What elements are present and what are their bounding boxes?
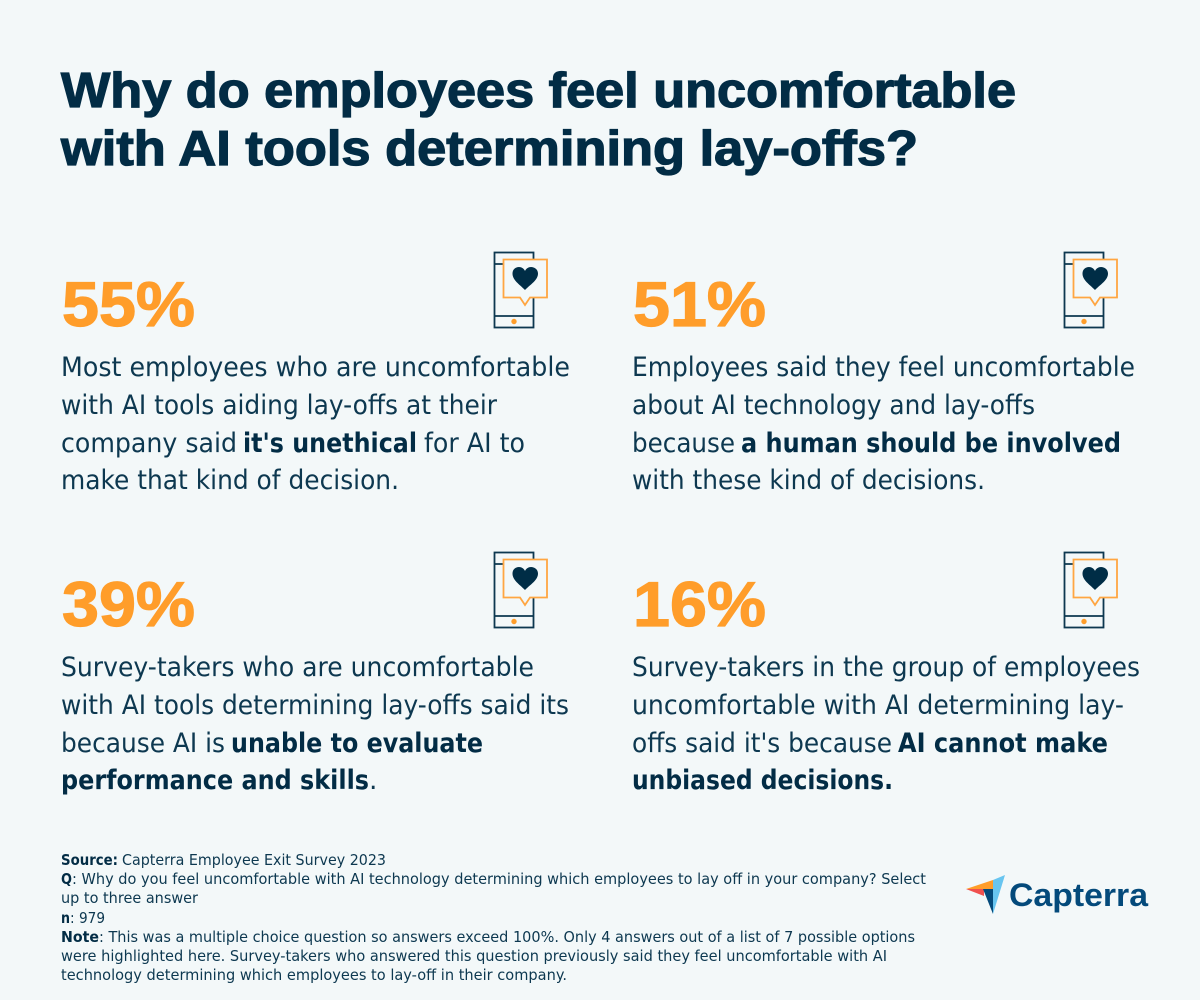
text: 39% description: because AI is <box>61 728 225 759</box>
stat: 16%: 16% <box>633 570 766 640</box>
stat: 55%: 55% <box>62 270 195 340</box>
text: 39% description: Survey-takers who are uncomfortable <box>61 652 534 683</box>
text: 39% description: with AI tools determining lay-offs said its <box>61 690 569 721</box>
title: with AI tools determining lay-offs? <box>60 122 918 176</box>
text: 55% description: make that kind of decision. <box>61 465 399 496</box>
text: 16% description: uncomfortable with AI determining lay- <box>632 690 1124 721</box>
source notes: Source: <box>61 851 118 869</box>
icon: phone with heart <box>1064 252 1117 328</box>
source notes: : 979 <box>70 909 105 927</box>
source notes: : Why do you feel uncomfortable with AI technology determining which employees to lay off in your company? Select <box>72 870 926 888</box>
source notes <box>61 851 926 984</box>
source notes: were highlighted here. Survey-takers who answered this question previously said they feel uncomfortable with AI <box>61 947 887 965</box>
panel: 39% unable to evaluate <box>61 552 569 796</box>
panel: 55% unethical <box>61 252 570 496</box>
text: 51% description: with these kind of decisions. <box>632 465 985 496</box>
source notes: Capterra Employee Exit Survey 2023 <box>122 851 386 869</box>
icon: phone with heart <box>494 552 547 628</box>
text: 55% description: company said <box>61 428 237 459</box>
source notes: n <box>61 909 70 927</box>
text: 55% description: Most employees who are uncomfortable <box>61 352 570 383</box>
stat: 51%: 51% <box>633 270 766 340</box>
text: 51% description: Employees said they feel uncomfortable <box>632 352 1135 383</box>
text: 16% description: Survey-takers in the group of employees <box>632 652 1140 683</box>
title <box>60 64 1016 176</box>
text: 39% description <box>61 652 569 796</box>
text: 55% description: it's unethical <box>243 428 417 459</box>
icon: Capterra arrow <box>966 875 1005 914</box>
source notes: up to three answer <box>61 889 199 907</box>
title: Why do employees feel uncomfortable <box>61 64 1016 118</box>
text: 55% description: with AI tools aiding lay-offs at their <box>61 390 497 421</box>
text: 51% description: a human should be involved <box>741 428 1121 459</box>
text: 16% description: AI cannot make <box>898 728 1108 759</box>
text: 51% description: because <box>632 428 735 459</box>
logo: Capterra <box>966 875 1148 914</box>
text: 16% description: unbiased decisions. <box>632 765 893 796</box>
source notes: Q <box>61 870 72 888</box>
text: 16% description: offs said it's because <box>632 728 892 759</box>
source notes: Note <box>61 928 99 946</box>
text: 51% description: about AI technology and lay-offs <box>632 390 1035 421</box>
text: 39% description: performance and skills <box>61 765 369 796</box>
source notes: technology determining which employees to lay-off in their company. <box>61 966 567 984</box>
icon: phone with heart <box>494 252 547 328</box>
text: 55% description: for AI to <box>424 428 525 459</box>
text: 55% description <box>61 352 570 496</box>
icon: phone with heart <box>1064 552 1117 628</box>
text: 39% description: unable to evaluate <box>231 728 483 759</box>
panel: 16% biased decisions <box>632 552 1140 796</box>
stat: 39%: 39% <box>62 570 195 640</box>
wordmark: Capterra <box>1009 877 1148 913</box>
source notes: : This was a multiple choice question so answers exceed 100%. Only 4 answers out of a list of 7 possible options <box>99 928 915 946</box>
text: 39% description: . <box>369 765 377 796</box>
text: 16% description <box>632 652 1140 796</box>
panel: 51% human involved <box>632 252 1135 496</box>
text: 51% description <box>632 352 1135 496</box>
